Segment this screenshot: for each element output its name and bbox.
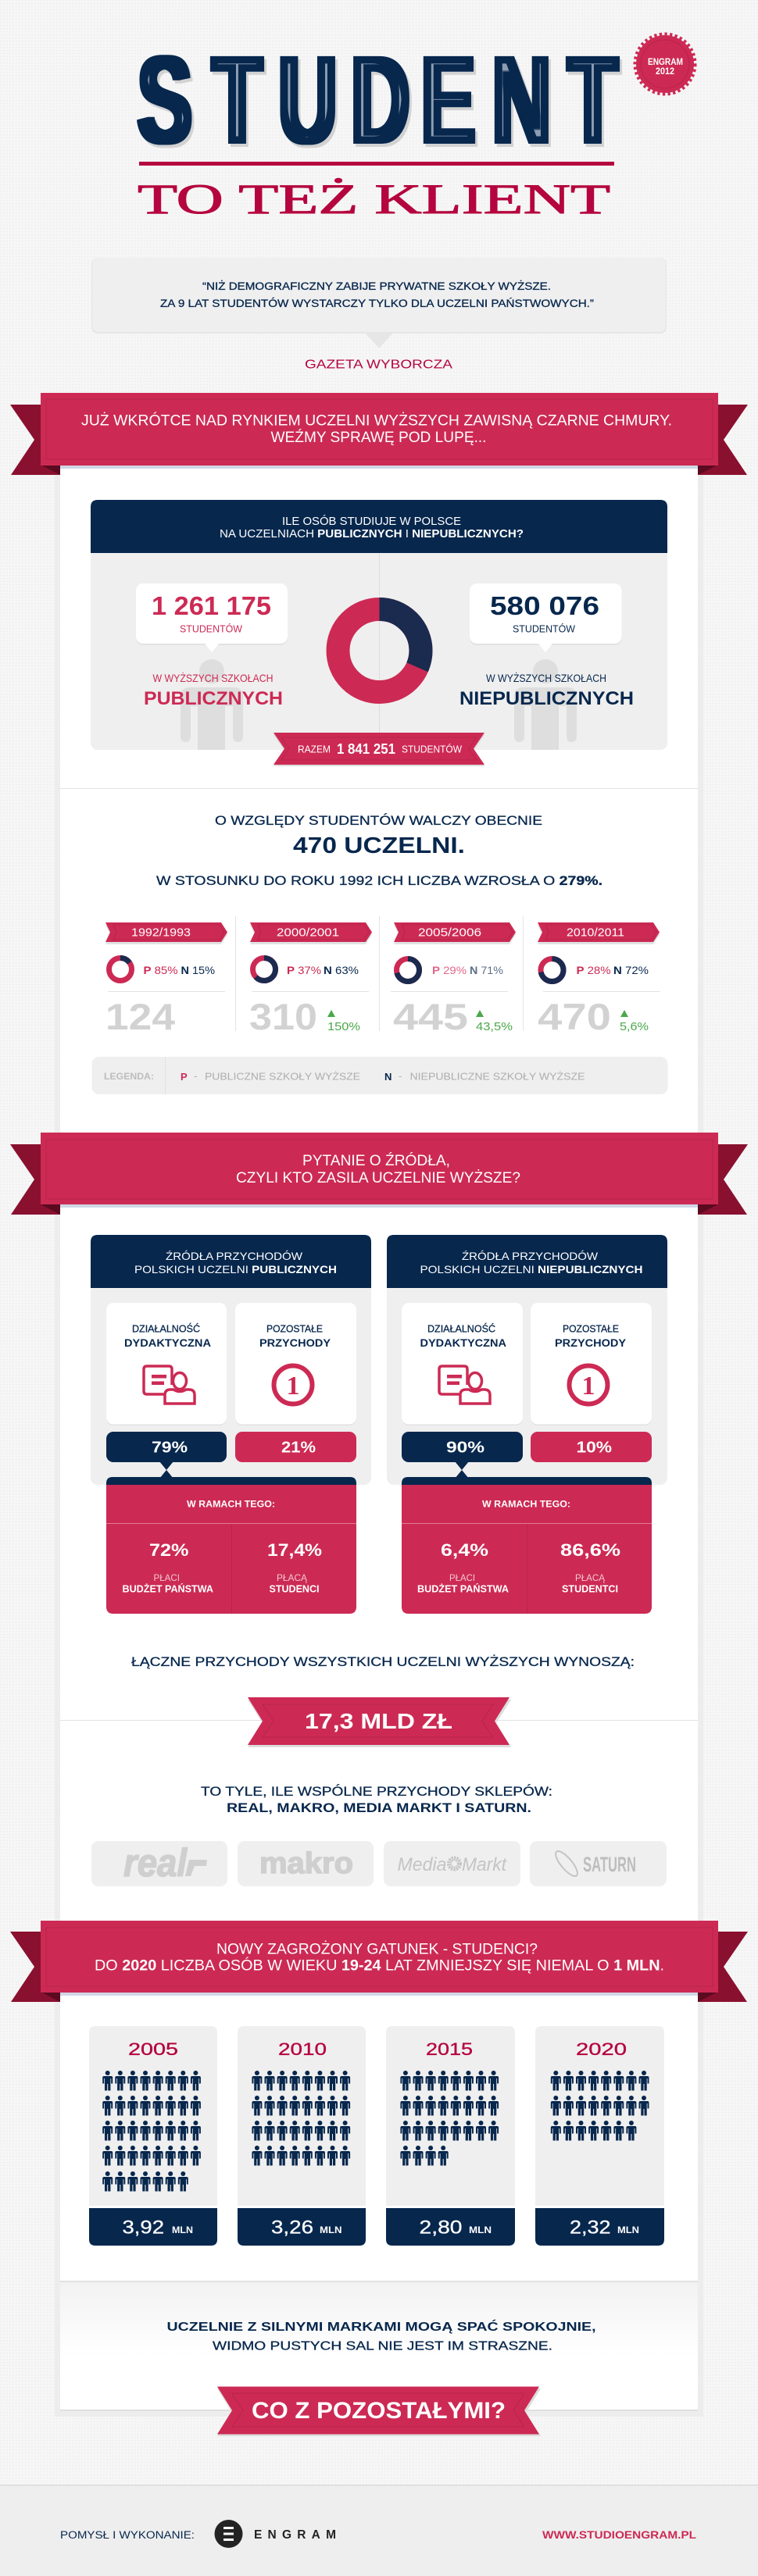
label: public: W WYŻSZYCH SZKOŁACH [153,671,274,684]
bubble: public students: STUDENTÓW [180,623,242,634]
card: other [235,1303,356,1425]
divider [60,1720,698,1721]
card: 2020 [535,2026,664,2246]
heading: 470 universities: 470 UCZELNI. [293,833,465,858]
engram 2012 seal [635,34,695,94]
ribbon: total: 1 841 251 [337,741,395,757]
column: 2005/2006: 445 [393,996,468,1037]
panel header: ILE OSÓB STUDIUJE W POLSCE [282,515,461,528]
card: 2005: 2005 [128,2039,178,2059]
legend: PUBLICZNE SZKOŁY WYŻSZE [205,1070,360,1083]
banner 3 [10,1921,748,2002]
label: non-public: NIEPUBLICZNYCH [459,688,634,709]
shops comparison text: REAL, MAKRO, MEDIA MARKT I SATURN. [227,1800,531,1815]
box: breakdown: W RAMACH TEGO: [482,1498,570,1509]
banner 1: WEŹMY SPRAWĘ POD LUPĘ... [270,430,486,446]
banner 2: PYTANIE O ŹRÓDŁA, [302,1152,450,1169]
box: breakdown: PŁACĄ [277,1574,307,1583]
legend [92,1057,667,1094]
white content panel [55,466,703,2417]
card: other: PRZYCHODY [555,1337,626,1349]
box: breakdown: 17,4% [267,1540,322,1560]
card: 2010: 2010 [278,2039,327,2059]
bubble: non-public students [470,583,622,652]
card: other: 1 [286,1372,300,1400]
bubble: public students: 1 261 175 [152,591,271,620]
card: teaching [402,1303,523,1425]
quote source: GAZETA WYBORCZA [305,358,452,372]
column: 2000/2001: P 37% [287,964,321,976]
people grid [252,2071,350,2165]
ribbon: total [274,733,484,766]
column: 2000/2001 [249,922,372,1037]
box: breakdown [106,1477,356,1614]
panel background [91,500,667,750]
quote bubble: “NIŻ DEMOGRAFICZNY ZABIJE PRYWATNE SZKOŁY WYŻSZE. [202,280,551,292]
column: 2005/2006 [391,922,516,1037]
column: 1992/1993: 124 [105,996,175,1037]
logo: saturn: SATURN [583,1853,636,1876]
logo: makro: makro [259,1847,353,1880]
pill: 10%: 10% [577,1439,612,1456]
legend: P [181,1071,188,1083]
legend: NIEPUBLICZNE SZKOŁY WYŻSZE [409,1070,585,1083]
closing section: UCZELNIE Z SILNYMI MARKAMI MOGĄ SPAĆ SPOKOJNIE, [167,2319,595,2334]
column: 2000/2001: N 63% [324,964,359,976]
label: public: PUBLICZNYCH [144,688,283,709]
column: 2010/2011: 470 [538,996,611,1037]
logo: media markt [384,1841,520,1886]
shops comparison text [201,1784,552,1815]
panel header [91,500,667,553]
box: breakdown: 6,4% [441,1540,488,1560]
quote bubble: ZA 9 LAT STUDENTÓW WYSTARCZY TYLKO DLA UCZELNI PAŃSTWOWYCH.” [160,298,594,309]
banner 1: JUŻ WKRÓTCE NAD RYNKIEM UCZELNI WYŻSZYCH ZAWISNĄ CZARNE CHMURY. [81,412,672,430]
card: other: POZOSTAŁE [266,1323,323,1334]
box: breakdown: W RAMACH TEGO: [187,1498,275,1509]
column: 1992/1993 [105,922,227,1037]
column: 2010/2011: P 28% [577,964,611,976]
card: 2010: MLN [320,2226,342,2235]
box: breakdown: BUDŻET PAŃSTWA [122,1582,213,1595]
column: 2010/2011: 2010/2011 [567,926,624,939]
subtitle: to też klient: TO TEŻ KLIENT [138,176,610,223]
column: 2000/2001: 310 [249,996,317,1037]
ribbon: total: STUDENTÓW [402,744,462,755]
box: breakdown [402,1477,652,1614]
column: 2000/2001: 150% [327,1020,360,1033]
legend: LEGENDA: [104,1072,154,1082]
donut chart [338,609,420,692]
footer: POMYSŁ I WYKONANIE: [60,2529,195,2541]
banner 2 [10,1133,748,1215]
footer: WWW.STUDIOENGRAM.PL [542,2528,696,2541]
people grid [102,2071,201,2192]
box: breakdown: 86,6% [560,1540,620,1560]
column: 2005/2006: N 71% [470,964,503,976]
column: 2010/2011: N 72% [613,964,649,976]
card: teaching [106,1303,227,1425]
card: 2005 [89,2026,217,2246]
people grid [400,2071,499,2165]
card: teaching: DZIAŁALNOŚĆ [427,1323,495,1334]
card: other [531,1303,652,1425]
label: non-public: W WYŻSZYCH SZKOŁACH [486,671,606,684]
card: 2020: 2,32 [570,2217,611,2239]
column: 2005/2006: 43,5% [476,1020,513,1033]
closing section [60,2281,698,2356]
pill: 21%: 21% [281,1439,316,1456]
pill: 10% [531,1432,652,1462]
panel: non-public revenue [387,1235,667,1614]
pill: 90% [402,1432,523,1462]
logo: media markt: Markt [462,1854,507,1875]
quote bubble [91,258,667,348]
column: 2010/2011: 5,6% [620,1020,649,1033]
column: 1992/1993: 1992/1993 [131,926,191,939]
card: 2005: MLN [172,2226,193,2235]
card: 2015 [386,2026,515,2246]
panel header: NA UCZELNIACH PUBLICZNYCH I NIEPUBLICZNYCH? [220,528,524,541]
logo: saturn [530,1841,667,1886]
ribbon: 17,3 mld zł [248,1697,511,1747]
card: 2020: 2020 [576,2039,627,2059]
card: 2015: MLN [469,2226,492,2235]
bubble: non-public students: STUDENTÓW [513,623,575,634]
column: 2010/2011 [538,922,660,1037]
main title: STUDENT: STUDENT [138,30,617,169]
panel: students count [91,500,667,766]
column: 1992/1993: P 85% [144,964,178,976]
card: 2010: 3,26 [271,2217,313,2239]
ribbon: co z pozostałymi: CO Z POZOSTAŁYMI? [252,2398,506,2424]
header: POLSKICH UCZELNI NIEPUBLICZNYCH [420,1263,642,1276]
card: other: POZOSTAŁE [563,1323,619,1334]
header: ŹRÓDŁA PRZYCHODÓW [166,1250,303,1262]
box: breakdown: PŁACĄ [575,1574,605,1583]
total revenue text: ŁĄCZNE PRZYCHODY WSZYSTKICH UCZELNI WYŻSZYCH WYNOSZĄ: [131,1654,635,1669]
banner 3: NOWY ZAGROŻONY GATUNEK - STUDENCI? [216,1942,538,1957]
ribbon: total: RAZEM [298,744,331,755]
label: non-public [459,671,634,709]
legend: - [194,1070,197,1082]
people grid [551,2071,649,2140]
box: breakdown: PŁACI [449,1574,475,1583]
header: ŹRÓDŁA PRZYCHODÓW [462,1250,599,1262]
box: breakdown: PŁACI [153,1574,180,1583]
card: 2005: 3,92 [122,2217,164,2239]
card: teaching: DYDAKTYCZNA [420,1337,506,1349]
logo: real: real [123,1841,188,1885]
timeline dividers [235,916,236,1031]
banner 2: CZYLI KTO ZASILA UCZELNIE WYŻSZE? [236,1170,520,1186]
card: 2020: MLN [617,2226,639,2235]
logo: media markt: Media [397,1854,447,1875]
card: teaching: DZIAŁALNOŚĆ [132,1323,200,1334]
heading: 470 universities: W STOSUNKU DO ROKU 1992 ICH LICZBA WZROSŁA O 279%. [156,873,602,888]
column: 2000/2001: 2000/2001 [277,926,339,939]
ribbon: 17,3 mld zł: 17,3 MLD ZŁ [305,1709,452,1733]
header [91,1235,371,1288]
legend: N [384,1071,392,1083]
engram logo [214,2520,336,2548]
engram 2012 seal: 2012 [656,67,674,77]
box: breakdown: STUDENTCI [562,1584,618,1595]
engram 2012 seal: ENGRAM [648,58,683,67]
card: teaching: DYDAKTYCZNA [124,1337,211,1349]
column: 1992/1993: N 15% [181,964,215,976]
label: public [144,671,283,709]
pill: 79%: 79% [152,1439,188,1456]
box: breakdown: STUDENCI [269,1584,319,1595]
column: 2005/2006: P 29% [432,964,467,976]
column: 2005/2006: 2005/2006 [418,926,481,939]
card: 2015: 2015 [426,2039,473,2059]
pill: 79% [106,1432,227,1462]
banner 1 [10,393,748,475]
panel: public revenue [91,1235,371,1614]
card: 2015: 2,80 [419,2217,463,2239]
closing section: WIDMO PUSTYCH SAL NIE JEST IM STRASZNE. [213,2340,552,2353]
bubble: public students [136,583,288,652]
ribbon: co z pozostałymi [217,2387,541,2436]
header [387,1235,667,1288]
engram logo: ENGRAM [254,2528,336,2542]
heading: 470 universities [156,813,602,888]
card: other: PRZYCHODY [259,1337,331,1349]
title rule [139,162,614,166]
pill: 90%: 90% [446,1439,484,1456]
box: breakdown: 72% [149,1540,189,1560]
banner 3: DO 2020 LICZBA OSÓB W WIEKU 19-24 LAT ZMNIEJSZY SIĘ NIEMAL O 1 MLN. [95,1957,664,1975]
legend: - [399,1070,402,1082]
logo: makro [238,1841,374,1886]
header: POLSKICH UCZELNI PUBLICZNYCH [134,1263,337,1276]
bubble: non-public students: 580 076 [490,591,599,620]
icon: person left [181,659,243,750]
heading: 470 universities: O WZGLĘDY STUDENTÓW WALCZY OBECNIE [215,813,542,828]
footer [0,2485,758,2576]
card: 2010 [238,2026,366,2246]
shops comparison text: TO TYLE, ILE WSPÓLNE PRZYCHODY SKLEPÓW: [201,1784,552,1799]
icon: person right [514,659,577,750]
divider [60,788,698,789]
pill: 21% [235,1432,356,1462]
logo: real [91,1841,227,1886]
card: other: 1 [581,1372,595,1400]
box: breakdown: BUDŻET PAŃSTWA [417,1582,509,1595]
